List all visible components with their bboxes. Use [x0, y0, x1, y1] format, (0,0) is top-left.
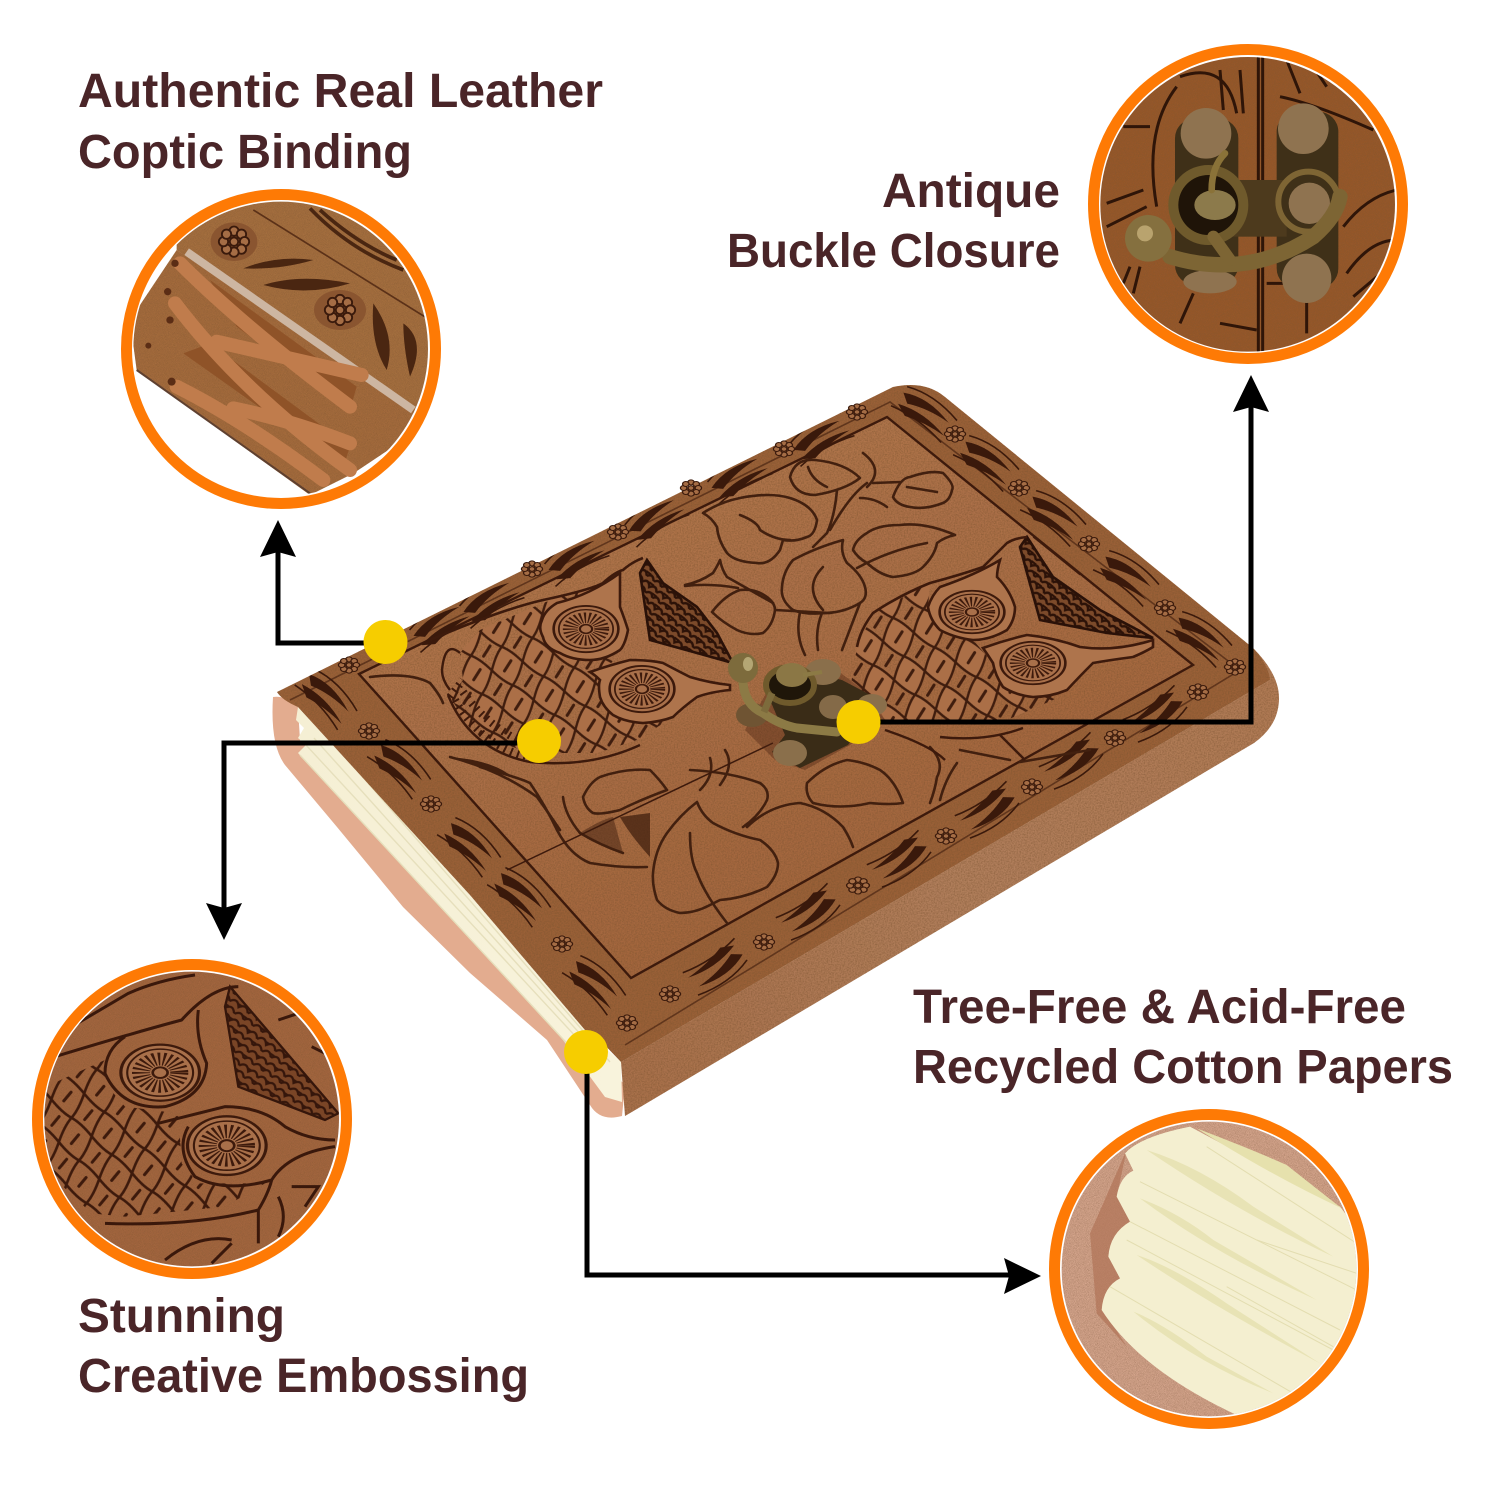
- leather background: [38, 967, 348, 1277]
- arrow: binding callout: [260, 520, 385, 643]
- latch hook arm and ball: [1125, 153, 1340, 265]
- marker dots: [364, 620, 880, 1074]
- embossed leather background: [1093, 50, 1403, 360]
- embossed lower vines and leaves: [370, 675, 1090, 923]
- detail circle: owl embossing: [38, 964, 348, 1277]
- journal pages: [296, 707, 622, 1102]
- paper stack: [1102, 1127, 1373, 1415]
- owl facial outlines: [55, 975, 335, 1263]
- cover centre panel: [359, 417, 1193, 978]
- heading: antique buckle closure: Antique: [882, 165, 1060, 218]
- heading: stunning creative embossing: Creative Embossing: [78, 1350, 529, 1403]
- heading: tree-free and acid-free papers: Recycled Cotton Papers: [913, 1041, 1453, 1094]
- embossed upper vines and leaves: [685, 453, 955, 655]
- right owl: [850, 537, 1153, 760]
- detail circle: antique buckle: [1093, 50, 1403, 360]
- heading: antique buckle closure: [727, 165, 1060, 278]
- owl scales: [38, 1060, 265, 1217]
- arrow: embossing callout: [206, 743, 539, 940]
- arrow: buckle callout: [858, 375, 1269, 722]
- arrow: paper callout: [587, 1052, 1041, 1294]
- detail circle: coptic binding: [126, 190, 443, 504]
- dark wing: [225, 987, 338, 1120]
- journal back cover inner edge: [272, 697, 625, 1118]
- heading: tree-free and acid-free papers: Tree-Free & Acid-Free: [913, 981, 1406, 1034]
- product: leather journal: [272, 380, 1279, 1118]
- left owl: [430, 558, 733, 763]
- latch plates and rivets: [1175, 103, 1338, 303]
- pink leather edge: [1062, 1122, 1356, 1416]
- detail circle: cotton paper pages: [1053, 1113, 1373, 1427]
- heading: authentic real leather coptic binding: Authentic Real Leather: [78, 65, 603, 118]
- spine panel with thread: [130, 250, 417, 495]
- embossed border sprigs: [295, 380, 1235, 1018]
- owl eyes: [121, 1045, 266, 1175]
- heading: authentic real leather coptic binding: Coptic Binding: [78, 126, 412, 179]
- heading: antique buckle closure: Buckle Closure: [727, 225, 1060, 278]
- heading: tree-free and acid-free papers: [913, 981, 1453, 1094]
- border flowers: [338, 404, 1246, 1031]
- heading: stunning creative embossing: [78, 1290, 529, 1403]
- heading: stunning creative embossing: Stunning: [78, 1290, 285, 1343]
- journal front cover: [277, 380, 1270, 1062]
- cover corner with floral emboss: [176, 202, 428, 414]
- cover seam line: [507, 743, 773, 870]
- journal spine: [621, 648, 1279, 1116]
- brass buckle clasp: [728, 653, 887, 770]
- heading: authentic real leather coptic binding: [78, 65, 603, 179]
